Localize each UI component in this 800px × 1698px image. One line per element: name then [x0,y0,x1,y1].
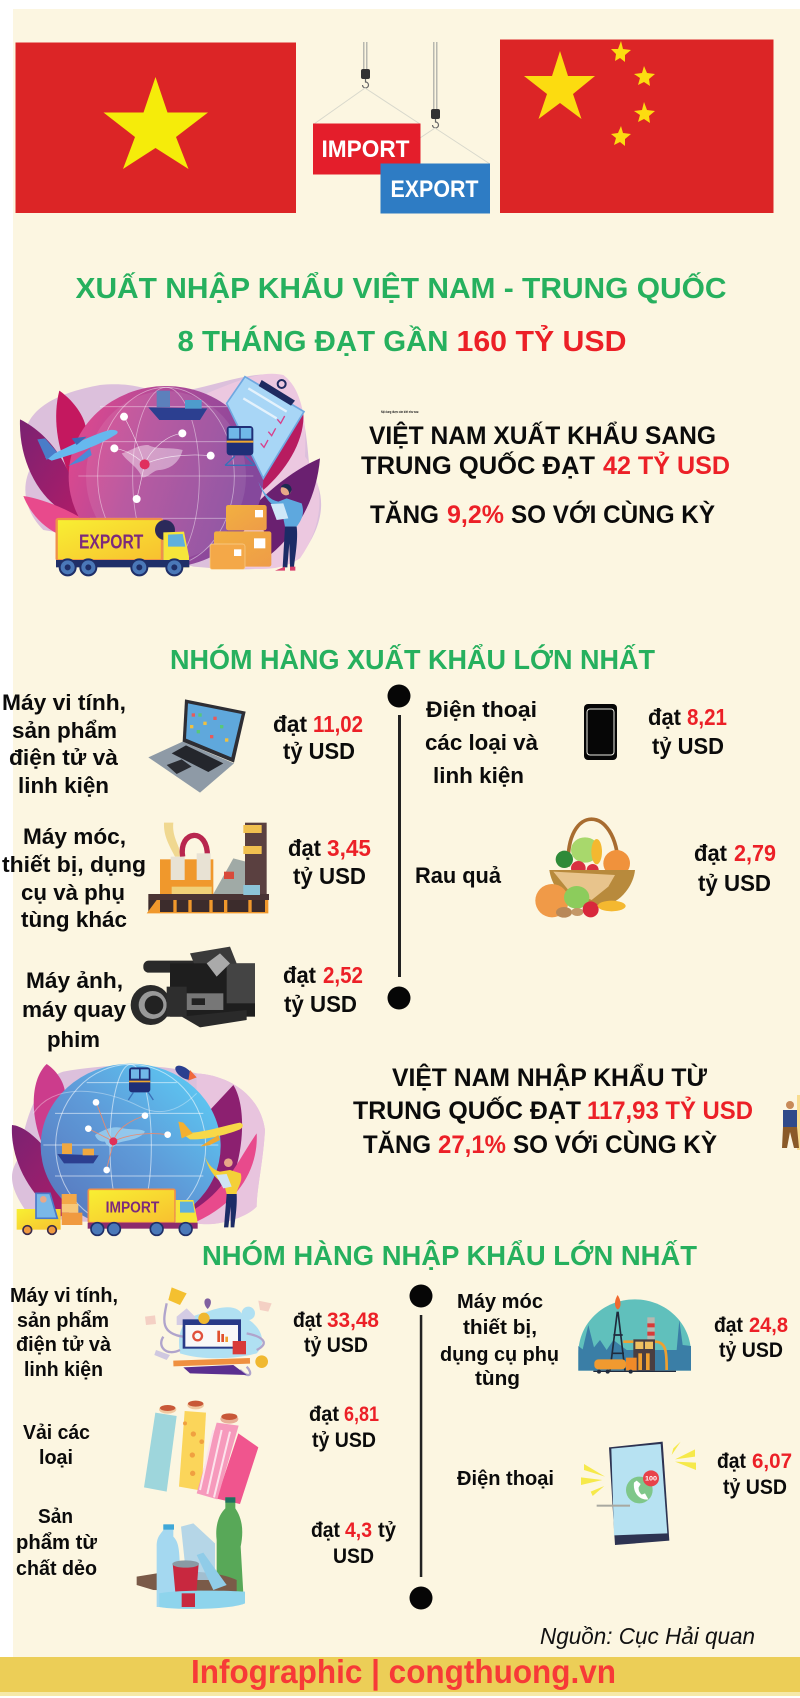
export container: EXPORT [390,176,479,203]
item: phones label: linh kiện [433,763,524,788]
icon: smartphone call [581,1442,696,1545]
value: 2,52: đạt [283,962,316,988]
item: computers label: sản phẩm [12,718,117,743]
value: 3,45: 3,45 [327,835,371,861]
forklift [17,1193,82,1234]
footer banner [0,1653,800,1696]
import illustration [12,1063,265,1235]
value: 4,3 [311,1519,396,1568]
item: machinery label: thiết bị, dụng [2,852,146,877]
globe [69,386,263,567]
import summary text: TRUNG QUỐC ĐẠT [353,1095,581,1125]
value: 6,81: tỷ USD [312,1429,376,1452]
value: 3,45: tỷ USD [293,863,366,889]
value: 8,21: tỷ USD [652,733,724,759]
import item: machinery label [440,1291,559,1390]
value: 33,48: tỷ USD [304,1334,368,1357]
title: 160 TỶ USD [456,324,626,358]
value: 33,48 [293,1309,379,1357]
item: vegetables label: Rau quả [415,863,501,888]
flag: China [500,40,774,213]
title [76,271,727,358]
truck [88,1189,198,1235]
export summary text: TRUNG QUỐC ĐẠT [361,450,595,480]
import item: machinery label: tùng [475,1368,520,1390]
title: XUẤT NHẬP KHẨU VIỆT NAM - TRUNG QUỐC [76,271,727,305]
value: 11,02: 11,02 [313,711,363,737]
icon: phone [584,704,617,760]
import summary text: VIỆT NAM NHẬP KHẨU TỪ [392,1062,707,1092]
value: 11,02 [273,711,363,764]
item: computers label: Máy vi tính, [2,690,126,715]
value: 4,3: đạt [311,1519,340,1542]
item: machinery label: tùng khác [21,907,127,932]
flag: Vietnam [16,42,296,213]
value: 11,02: đạt [273,711,307,737]
value: 2,52: 2,52 [323,962,363,988]
icon: laptop [148,699,246,793]
import item: phones label: Điện thoại [457,1468,554,1490]
title: 8 THÁNG ĐẠT GẦN [178,324,448,358]
item: computers label: linh kiện [18,773,109,798]
icon: factory [147,823,269,913]
export summary text: 42 TỶ USD [603,450,730,480]
value: 11,02: tỷ USD [283,738,355,764]
heading: import groups: NHÓM HÀNG NHẬP KHẨU LỚN NHẤT [202,1240,697,1271]
value: 6,81 [309,1403,379,1452]
value: 33,48: đạt [293,1309,322,1332]
value: 2,79: đạt [694,840,727,866]
value: 4,3: tỷ [378,1519,396,1542]
truck: IMPORT [106,1200,160,1217]
icon: refinery [578,1295,691,1374]
item: machinery label [2,824,146,932]
value: 6,07: tỷ USD [723,1476,787,1499]
boxes [210,505,271,569]
import summary text: 117,93 TỶ USD [587,1095,753,1125]
worker [258,482,303,571]
train [128,1067,153,1100]
value: 6,81: đạt [309,1403,339,1426]
value: 6,07 [717,1450,792,1499]
ship [57,1143,99,1163]
value: 6,07: đạt [717,1450,746,1473]
import export containers icon [313,42,490,214]
heading: export groups: NHÓM HÀNG XUẤT KHẨU LỚN NHẤT [170,644,655,675]
value: 3,45: đạt [288,835,321,861]
value: 4,3: 4,3 [345,1519,372,1542]
export summary text: SO VỚI CÙNG KỲ [511,499,715,529]
export summary text [361,420,730,529]
import container: IMPORT [322,136,410,163]
value: 24,8: tỷ USD [719,1339,783,1362]
globe [33,1064,221,1228]
item: cameras label [22,968,126,1052]
value: 6,81: 6,81 [344,1403,379,1426]
import item: fabric label: loại [39,1447,73,1469]
footer banner: Infographic | congthuong.vn [191,1653,616,1690]
value: 24,8: 24,8 [749,1314,788,1337]
train [225,426,255,465]
item: machinery label: cụ và phụ [21,880,125,905]
import summary text: TĂNG [363,1130,431,1159]
clipboard [227,377,304,478]
value: 24,8 [714,1314,788,1362]
airplane [37,430,118,466]
import item: computers label: điện tử và [16,1334,112,1356]
truck: EXPORT [79,531,143,553]
item: machinery label: Máy móc, [23,824,126,849]
source note: Nguồn: Cục Hải quan [540,1623,755,1649]
import item: machinery label: dụng cụ phụ [440,1344,559,1366]
value: 2,52 [283,962,363,1017]
export illustration [20,374,321,575]
value: 2,52: tỷ USD [284,991,357,1017]
tiny note text: Nội dung được cần biết như sau: [381,409,419,414]
icon: fabric rolls [144,1401,258,1504]
import item: machinery label: Máy móc [457,1291,543,1313]
item: phones label: Điện thoại [426,697,537,722]
value: 4,3: USD [333,1545,374,1568]
timeline: export [388,684,410,1010]
item: phones label: các loại và [425,730,538,755]
import item: computers label: sản phẩm [17,1310,109,1332]
item: cameras label: máy quay [22,997,126,1022]
item: computers label: điện tử và [9,745,118,770]
icon: fruit basket [535,819,635,918]
item: computers label [2,690,126,798]
value: 8,21: đạt [648,704,681,730]
item: phones label [425,697,538,788]
value: 6,07: 6,07 [752,1450,792,1473]
import item: computers label [10,1285,118,1381]
item: cameras label: Máy ảnh, [26,968,123,993]
import summary text: 27,1% [438,1131,506,1159]
stray figure at right edge [782,1095,800,1150]
value: 33,48: 33,48 [327,1309,379,1332]
export container [380,164,490,214]
icon: digital computer [145,1287,272,1375]
import item: machinery label: thiết bị, [463,1317,537,1339]
item: cameras label: phim [47,1027,100,1052]
value: 2,79: tỷ USD [698,870,771,896]
export summary text: TĂNG [370,500,439,529]
leaves [12,1064,257,1222]
import item: plastics label [16,1506,98,1580]
import container [313,124,420,174]
value: 3,45 [288,835,371,889]
import item: computers label: Máy vi tính, [10,1285,118,1307]
import item: computers label: linh kiện [24,1359,103,1381]
leaves [20,391,320,555]
truck [56,519,189,575]
value: 2,79: 2,79 [734,840,776,866]
import item: plastics label: Sản [38,1506,73,1528]
import summary text [353,1062,753,1159]
export summary text: VIỆT NAM XUẤT KHẨU SANG [369,420,716,450]
value: 8,21: 8,21 [687,704,727,730]
value: 24,8: đạt [714,1314,743,1337]
ship [148,391,207,420]
import summary text: SO VỚi CÙNG KỲ [513,1129,717,1159]
timeline: import [410,1284,432,1610]
value: 2,79 [694,840,776,896]
import item: fabric label [23,1422,90,1469]
import item: fabric label: Vải các [23,1422,90,1444]
airplane [178,1122,243,1147]
worker [205,1157,241,1227]
rocket [173,1063,197,1082]
export summary text: 9,2% [447,501,504,529]
icon: plastic products [137,1497,245,1609]
import item: plastics label: phẩm từ [16,1532,98,1554]
import item: plastics label: chất dẻo [16,1558,97,1580]
icon: video camera [131,947,255,1027]
value: 8,21 [648,704,727,759]
icon: smartphone call: 100 [645,1477,658,1483]
